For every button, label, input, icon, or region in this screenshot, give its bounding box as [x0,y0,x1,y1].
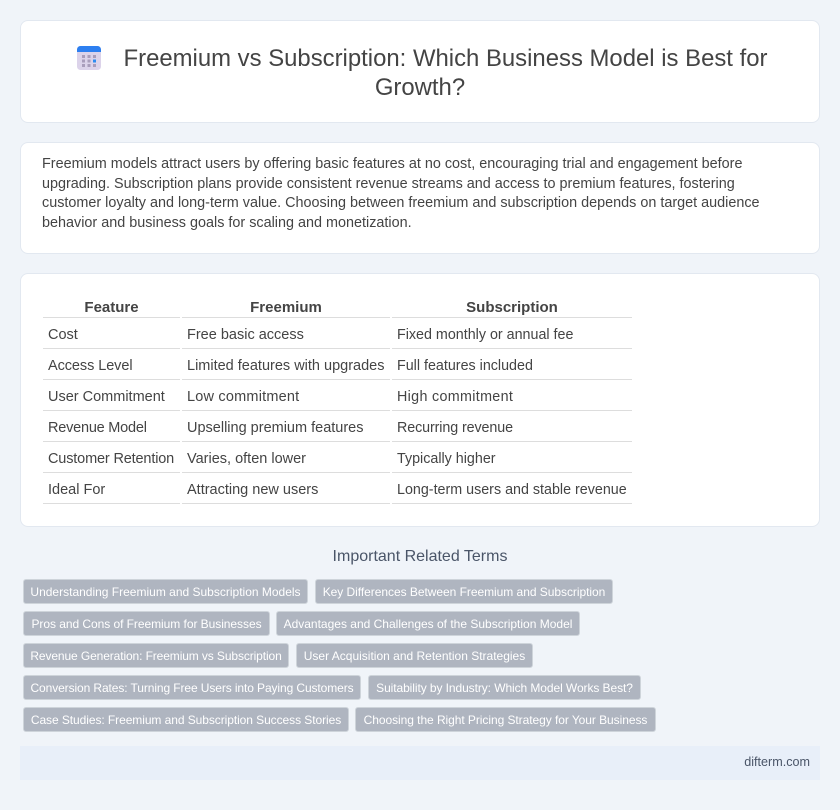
table: comparison: User Commitment [48,389,165,405]
tags: related terms: Conversion Rates: Turning Free Users into Paying Customers [30,681,354,695]
heading: related terms: Important Related Terms [333,548,507,565]
title: Growth? [375,74,465,101]
table: comparison: Revenue Model [48,420,147,436]
table: comparison: Cost [48,327,78,343]
table: comparison: Upselling premium features [187,420,364,436]
tags: related terms: Pros and Cons of Freemium for Businesses [31,617,262,631]
title: Freemium vs Subscription: Which Business Model is Best for [124,45,767,72]
table: comparison: Typically higher [397,451,496,467]
table: comparison: Long-term users and stable revenue [397,482,627,498]
table: comparison: Freemium [250,299,322,316]
footer text: difterm.com [744,755,810,769]
panel: intro text [20,142,820,254]
table: comparison: Limited features with upgrades [187,358,384,374]
tags: related terms: Key Differences Between Freemium and Subscription [323,585,605,599]
icon: calendar [77,46,101,70]
table: comparison: Varies, often lower [187,451,306,467]
text block: intro: Freemium models attract users by offering basic features at no cost, encouraging trial and engagement before [42,156,742,172]
table: comparison: Access Level [48,358,132,374]
title [124,45,768,101]
table: comparison: Attracting new users [187,482,318,498]
tags: related terms: Understanding Freemium and Subscription Models [30,585,301,599]
tags: related terms: Suitability by Industry: Which Model Works Best? [376,681,633,695]
tags: related terms: Advantages and Challenges of the Subscription Model [284,617,572,631]
table: comparison: Recurring revenue [397,420,513,436]
table: comparison [43,299,632,504]
tags: related terms: Case Studies: Freemium and Subscription Success Stories [31,713,341,727]
text block: intro: upgrading. Subscription plans provide consistent revenue streams and access to premium features, fostering [42,176,735,192]
tags: related terms: Choosing the Right Pricing Strategy for Your Business [364,713,647,727]
footer bar [20,746,820,780]
table: comparison: Low commitment [187,389,299,405]
text block: intro: customer loyalty and long-term value. Choosing between freemium and subscription depends on target audience [42,195,760,211]
panel: comparison table [20,273,820,527]
table: comparison: Full features included [397,358,533,374]
table: comparison: Fixed monthly or annual fee [397,327,573,343]
tags: related terms: Revenue Generation: Freemium vs Subscription [30,649,282,663]
table: comparison: Customer Retention [48,451,174,467]
tags: related terms [23,579,656,732]
table: comparison: Free basic access [187,327,304,343]
text block: intro: behavior and business goals for scaling and monetization. [42,214,412,230]
text block: intro [42,156,760,230]
table: comparison: Ideal For [48,482,105,498]
table: comparison: Feature [84,299,139,316]
panel: title card [20,20,820,123]
table: comparison: High commitment [397,389,513,405]
tags: related terms: User Acquisition and Retention Strategies [304,649,525,663]
table: comparison: Subscription [466,299,558,316]
